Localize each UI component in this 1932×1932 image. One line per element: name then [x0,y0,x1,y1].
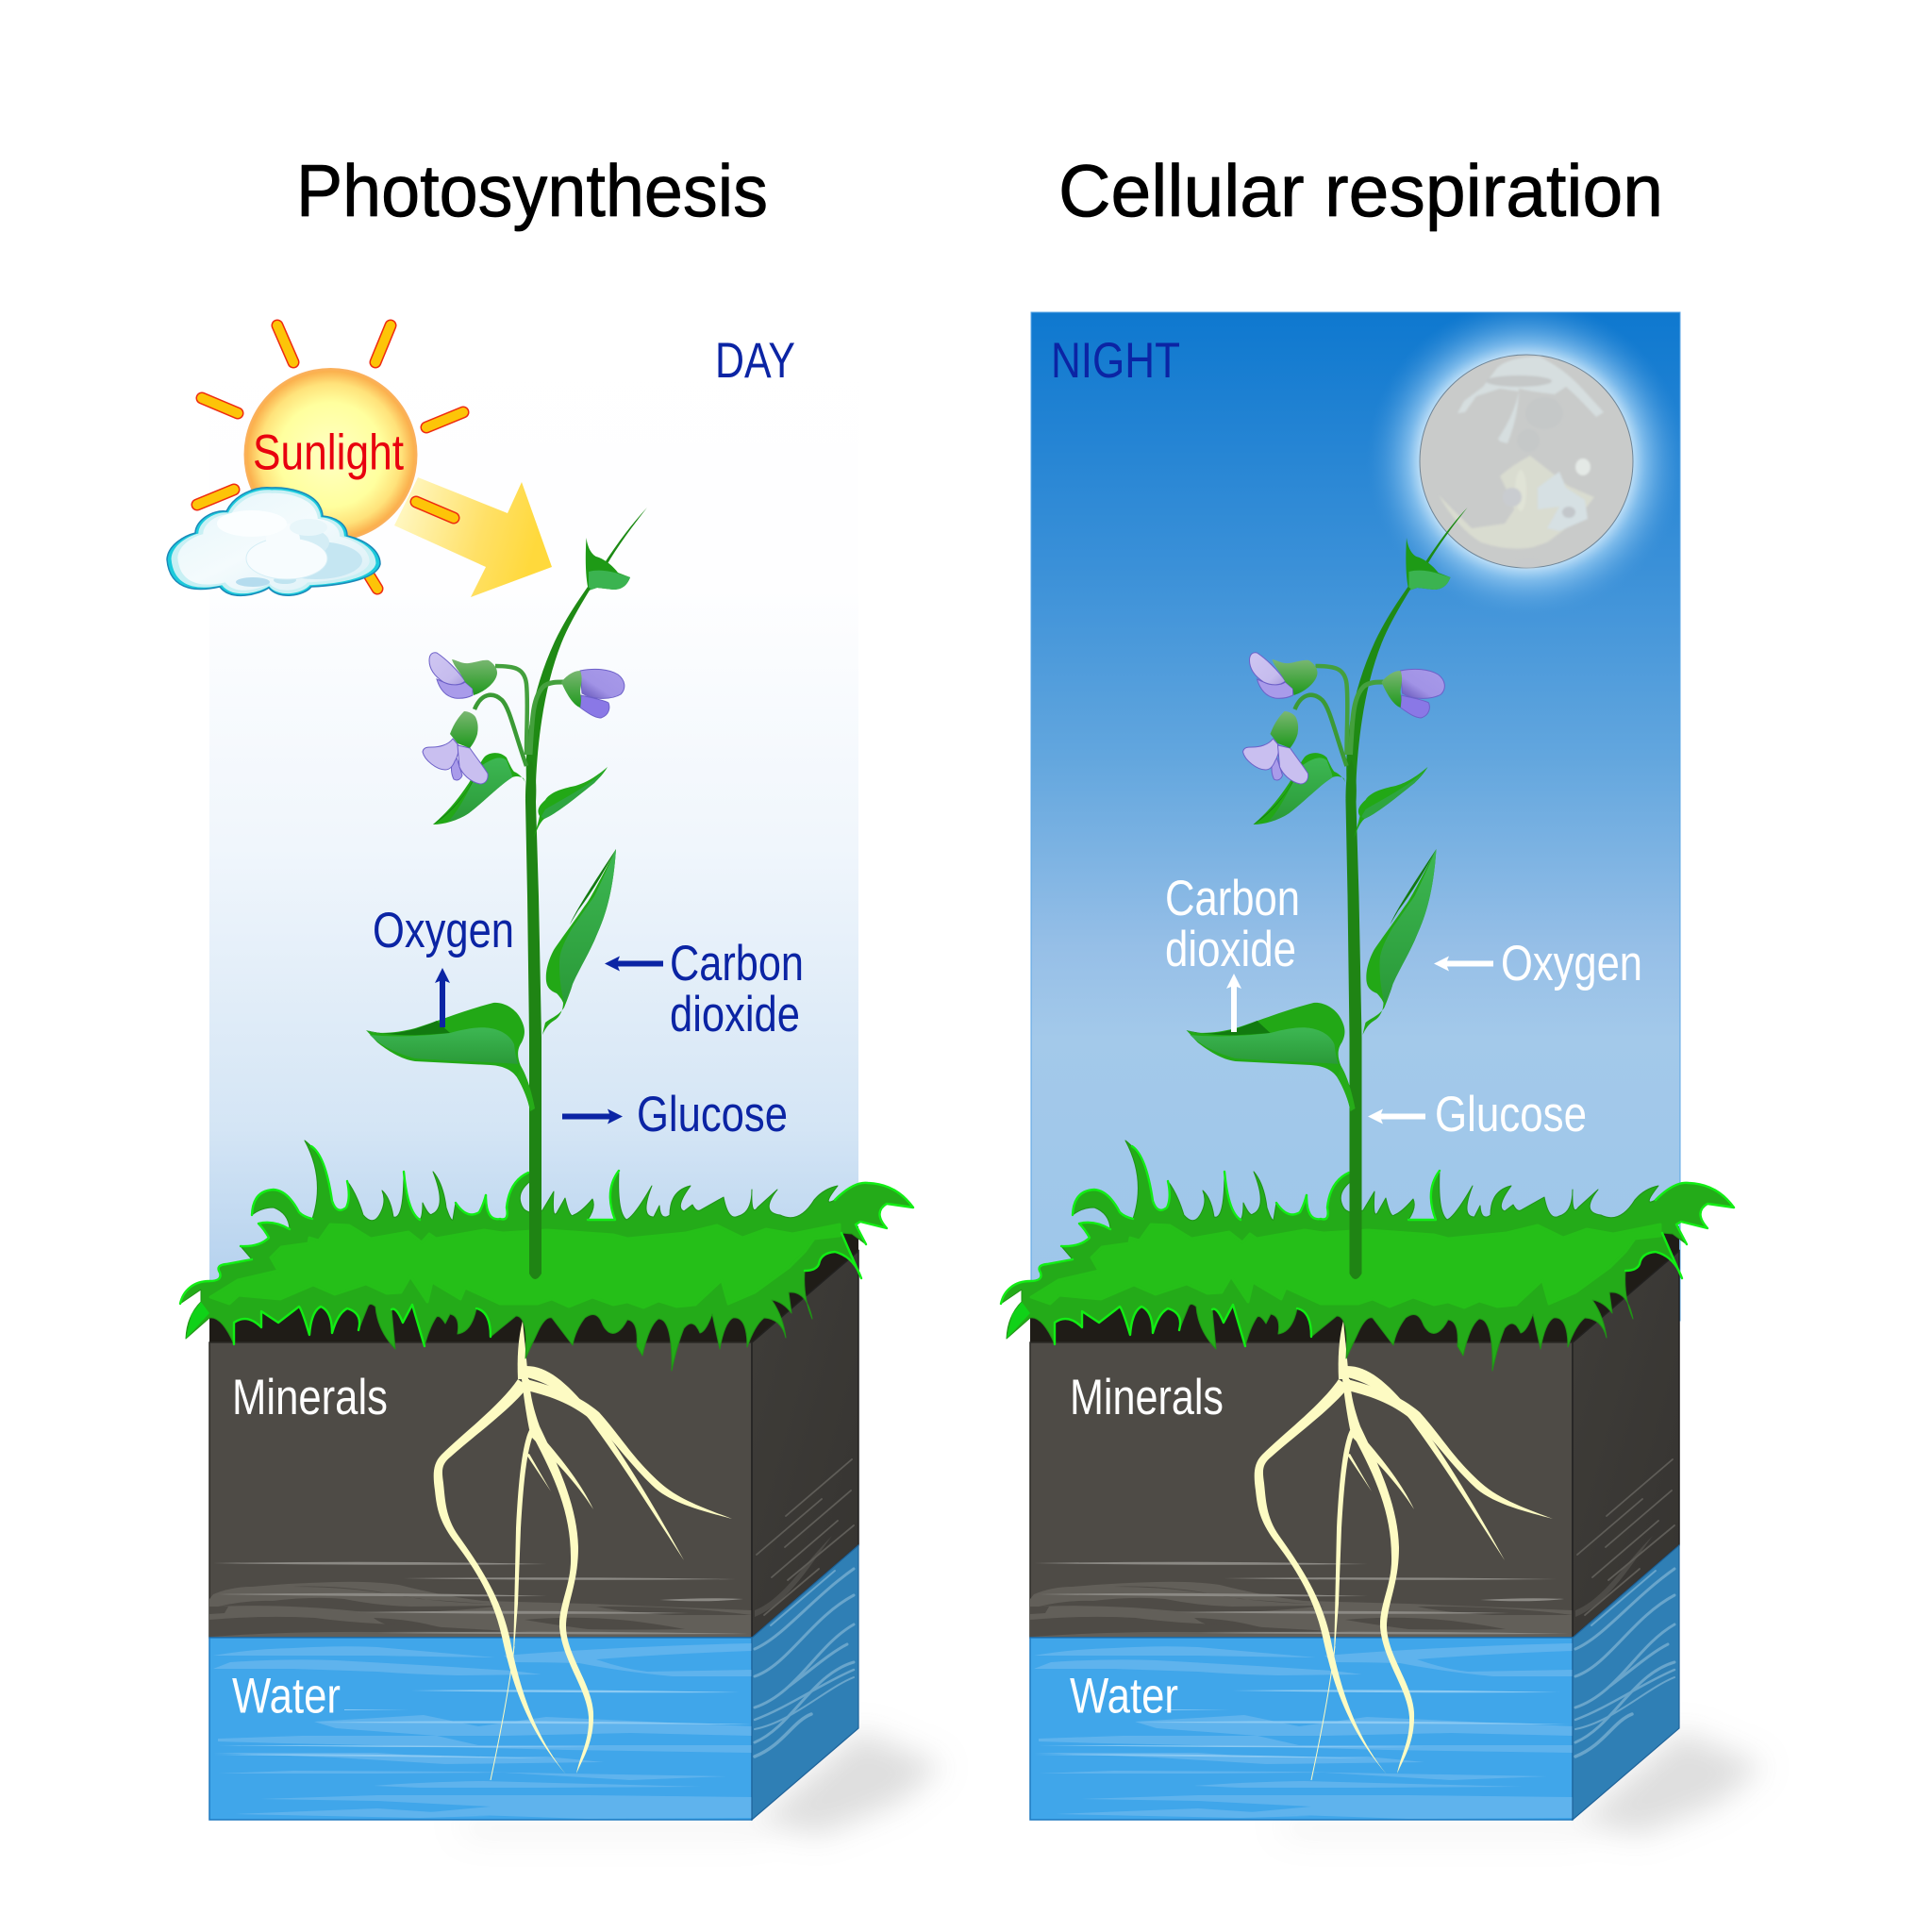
oxygen label: day: Oxygen [373,903,514,958]
arrow: carbon dioxide up, night [1226,974,1241,1032]
plant: day [366,508,647,1279]
soil and water block: night [1030,1226,1679,1820]
title: Photosynthesis: Photosynthesis [296,149,768,232]
plant: night [1187,508,1468,1279]
minerals label: day: Minerals [232,1370,388,1425]
soil and water block: day [209,1226,858,1820]
panel: night sky [1031,312,1680,1321]
carbon dioxide label: night: Carbon [1165,871,1300,926]
minerals label: night: Minerals [1070,1370,1224,1425]
title: Cellular respiration: Cellular respiration [1058,149,1663,232]
carbon dioxide label: day [670,936,804,1042]
night label: NIGHT [1051,333,1180,389]
arrow: glucose in, night [1368,1109,1425,1124]
carbon dioxide label: night: dioxide [1165,922,1296,977]
roots: night [1255,1321,1553,1780]
arrow: oxygen up, day [435,968,450,1027]
block shadow: night [1274,1731,1764,1836]
sunlight arrow [394,477,552,597]
grass: day [180,1141,913,1371]
day label: DAY [715,333,795,389]
block shadow: day [453,1731,943,1836]
arrow: glucose out, day [562,1109,623,1124]
carbon dioxide label: day: Carbon [670,936,804,991]
roots: day [434,1321,732,1780]
glucose label: night: Glucose [1435,1087,1587,1142]
panel: day sky [209,312,858,1321]
moon halo [1377,313,1676,606]
icon: moon [1420,355,1633,568]
oxygen label: night: Oxygen [1501,936,1642,991]
water label: day: Water [232,1668,341,1724]
carbon dioxide label: day: dioxide [670,987,800,1042]
arrow: oxygen in, night [1434,957,1493,972]
glucose label: day: Glucose [637,1087,788,1142]
water label: night: Water [1070,1668,1178,1724]
icon: sun [197,325,463,589]
icon: cloud [167,488,380,595]
arrow: carbon dioxide in, day [605,957,663,972]
grass: night [1001,1141,1734,1371]
sunlight label: Sunlight [253,425,404,481]
carbon dioxide label: night [1165,871,1300,977]
